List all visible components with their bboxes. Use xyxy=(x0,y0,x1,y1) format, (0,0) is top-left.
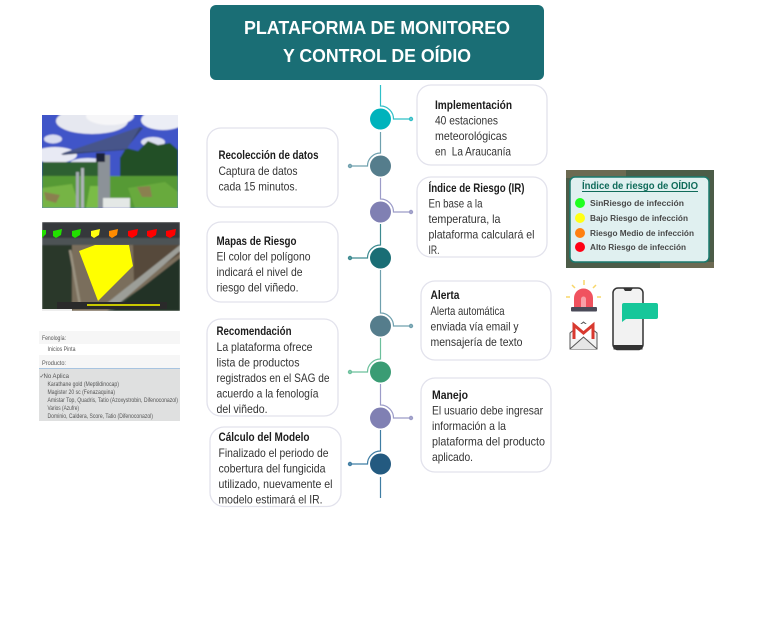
icon: alarm siren xyxy=(566,280,601,312)
panel: recomendación: lista de productos xyxy=(216,356,300,370)
panel: manejo: plataforma del producto xyxy=(432,434,545,448)
panel: mapas de riesgo: riesgo del viñedo. xyxy=(216,280,298,294)
legend: índice de riesgo de oídio xyxy=(566,170,714,268)
panel: índice de riesgo: IR. xyxy=(428,243,440,257)
panel: cálculo del modelo: Finalizado el periodo de xyxy=(218,446,329,460)
form: phenology and product selector: ✓ xyxy=(40,374,45,380)
title banner: PLATAFORMA DE MONITOREO xyxy=(244,17,510,38)
panel: alerta: Alerta xyxy=(430,288,460,302)
form: phenology and product selector: Producto: xyxy=(42,361,66,367)
form: phenology and product selector: No Aplica xyxy=(44,374,70,380)
panel: implementación xyxy=(417,85,547,165)
panel: mapas de riesgo xyxy=(207,222,338,302)
panel: cálculo del modelo: utilizado, nuevamente el xyxy=(218,477,332,491)
panel: manejo: El usuario debe ingresar xyxy=(432,404,543,418)
panel: índice de riesgo: Índice de Riesgo (IR) xyxy=(428,181,525,195)
panel: recomendación: del viñedo. xyxy=(216,402,268,416)
legend: índice de riesgo de oídio: SinRiesgo de infección xyxy=(590,198,684,208)
photo: weather station with solar panel xyxy=(42,115,178,208)
panel: implementación: en La Araucanía xyxy=(435,144,511,158)
node 2: recolección xyxy=(348,132,391,176)
panel: cálculo del modelo xyxy=(210,427,341,506)
legend: índice de riesgo de oídio: Riesgo Medio de infección xyxy=(590,228,694,238)
panel: recolección de datos: Recolección de datos xyxy=(218,148,319,162)
legend: índice de riesgo de oídio: Bajo Riesgo de infección xyxy=(590,213,688,223)
panel: cálculo del modelo: modelo estimará el IR. xyxy=(218,492,322,506)
node 4: mapas de riesgo xyxy=(348,224,391,268)
title banner: Y CONTROL DE OÍDIO xyxy=(283,45,471,66)
panel: alerta: mensajería de texto xyxy=(430,335,523,349)
panel: mapas de riesgo: Mapas de Riesgo xyxy=(216,234,296,248)
form: phenology and product selector: Fenología: xyxy=(42,336,66,342)
form: phenology and product selector xyxy=(39,331,180,421)
timeline xyxy=(348,85,413,498)
panel: cálculo del modelo: cobertura del fungicida xyxy=(218,462,326,476)
node 5: alerta xyxy=(370,270,413,336)
panel: alerta: enviada vía email y xyxy=(430,320,519,334)
panel: recolección de datos xyxy=(207,128,338,207)
panel: implementación: Implementación xyxy=(435,98,512,112)
panel: mapas de riesgo: indicará el nivel de xyxy=(216,265,303,279)
panel: recolección de datos: cada 15 minutos. xyxy=(218,180,298,194)
panel: manejo: aplicado. xyxy=(432,450,473,464)
node 8: cálculo del modelo xyxy=(348,430,391,498)
node 1: implementación xyxy=(370,85,413,130)
icon: smartphone with message bubble xyxy=(613,288,658,350)
form: phenology and product selector: Amistar Top, Quadris, Tatio (Azoxystrobin, Difenoconazol) xyxy=(48,398,178,404)
form: phenology and product selector: Karathane gold (Meptildinocap) xyxy=(48,382,119,388)
panel: recomendación: acuerdo a la fenología xyxy=(216,386,319,400)
form: phenology and product selector: Inicios Pinta xyxy=(48,347,76,353)
panel: implementación: 40 estaciones xyxy=(435,114,498,128)
panel: índice de riesgo: plataforma calculará el xyxy=(428,228,534,242)
form: phenology and product selector: Varios (Azufre) xyxy=(48,406,79,412)
panel: manejo: información a la xyxy=(432,419,506,433)
panel: recomendación: La plataforma ofrece xyxy=(216,340,313,354)
title banner xyxy=(210,5,544,80)
form: phenology and product selector: Dominio, Caldera, Score, Tatio (Difenoconazol) xyxy=(48,414,153,420)
panel: cálculo del modelo: Cálculo del Modelo xyxy=(218,430,310,444)
panel: recomendación: registrados en el SAG de xyxy=(216,371,330,385)
icon: gmail envelope xyxy=(570,322,597,349)
panel: manejo xyxy=(421,378,551,472)
panel: índice de riesgo: temperatura, la xyxy=(428,212,501,226)
legend: índice de riesgo de oídio: Alto Riesgo de infección xyxy=(590,242,686,252)
panel: índice de riesgo: En base a la xyxy=(428,196,483,210)
panel: recolección de datos: Captura de datos xyxy=(218,164,298,178)
node 7: manejo xyxy=(370,384,413,428)
panel: mapas de riesgo: El color del polígono xyxy=(216,250,311,264)
panel: recomendación xyxy=(207,319,338,416)
panel: implementación: meteorológicas xyxy=(435,129,507,143)
panel: recomendación: Recomendación xyxy=(216,324,292,338)
legend: índice de riesgo de oídio: Índice de riesgo de OÍDIO xyxy=(582,179,698,192)
panel: alerta: Alerta automática xyxy=(430,304,505,318)
node 3: índice de riesgo xyxy=(370,178,413,222)
map: vineyard risk polygon xyxy=(38,222,180,311)
panel: alerta xyxy=(421,281,551,360)
node 6: recomendación xyxy=(348,338,391,382)
form: phenology and product selector: Magister 20 sc (Fenazaquina) xyxy=(48,390,115,396)
panel: índice de riesgo xyxy=(417,177,547,257)
panel: manejo: Manejo xyxy=(432,388,468,402)
